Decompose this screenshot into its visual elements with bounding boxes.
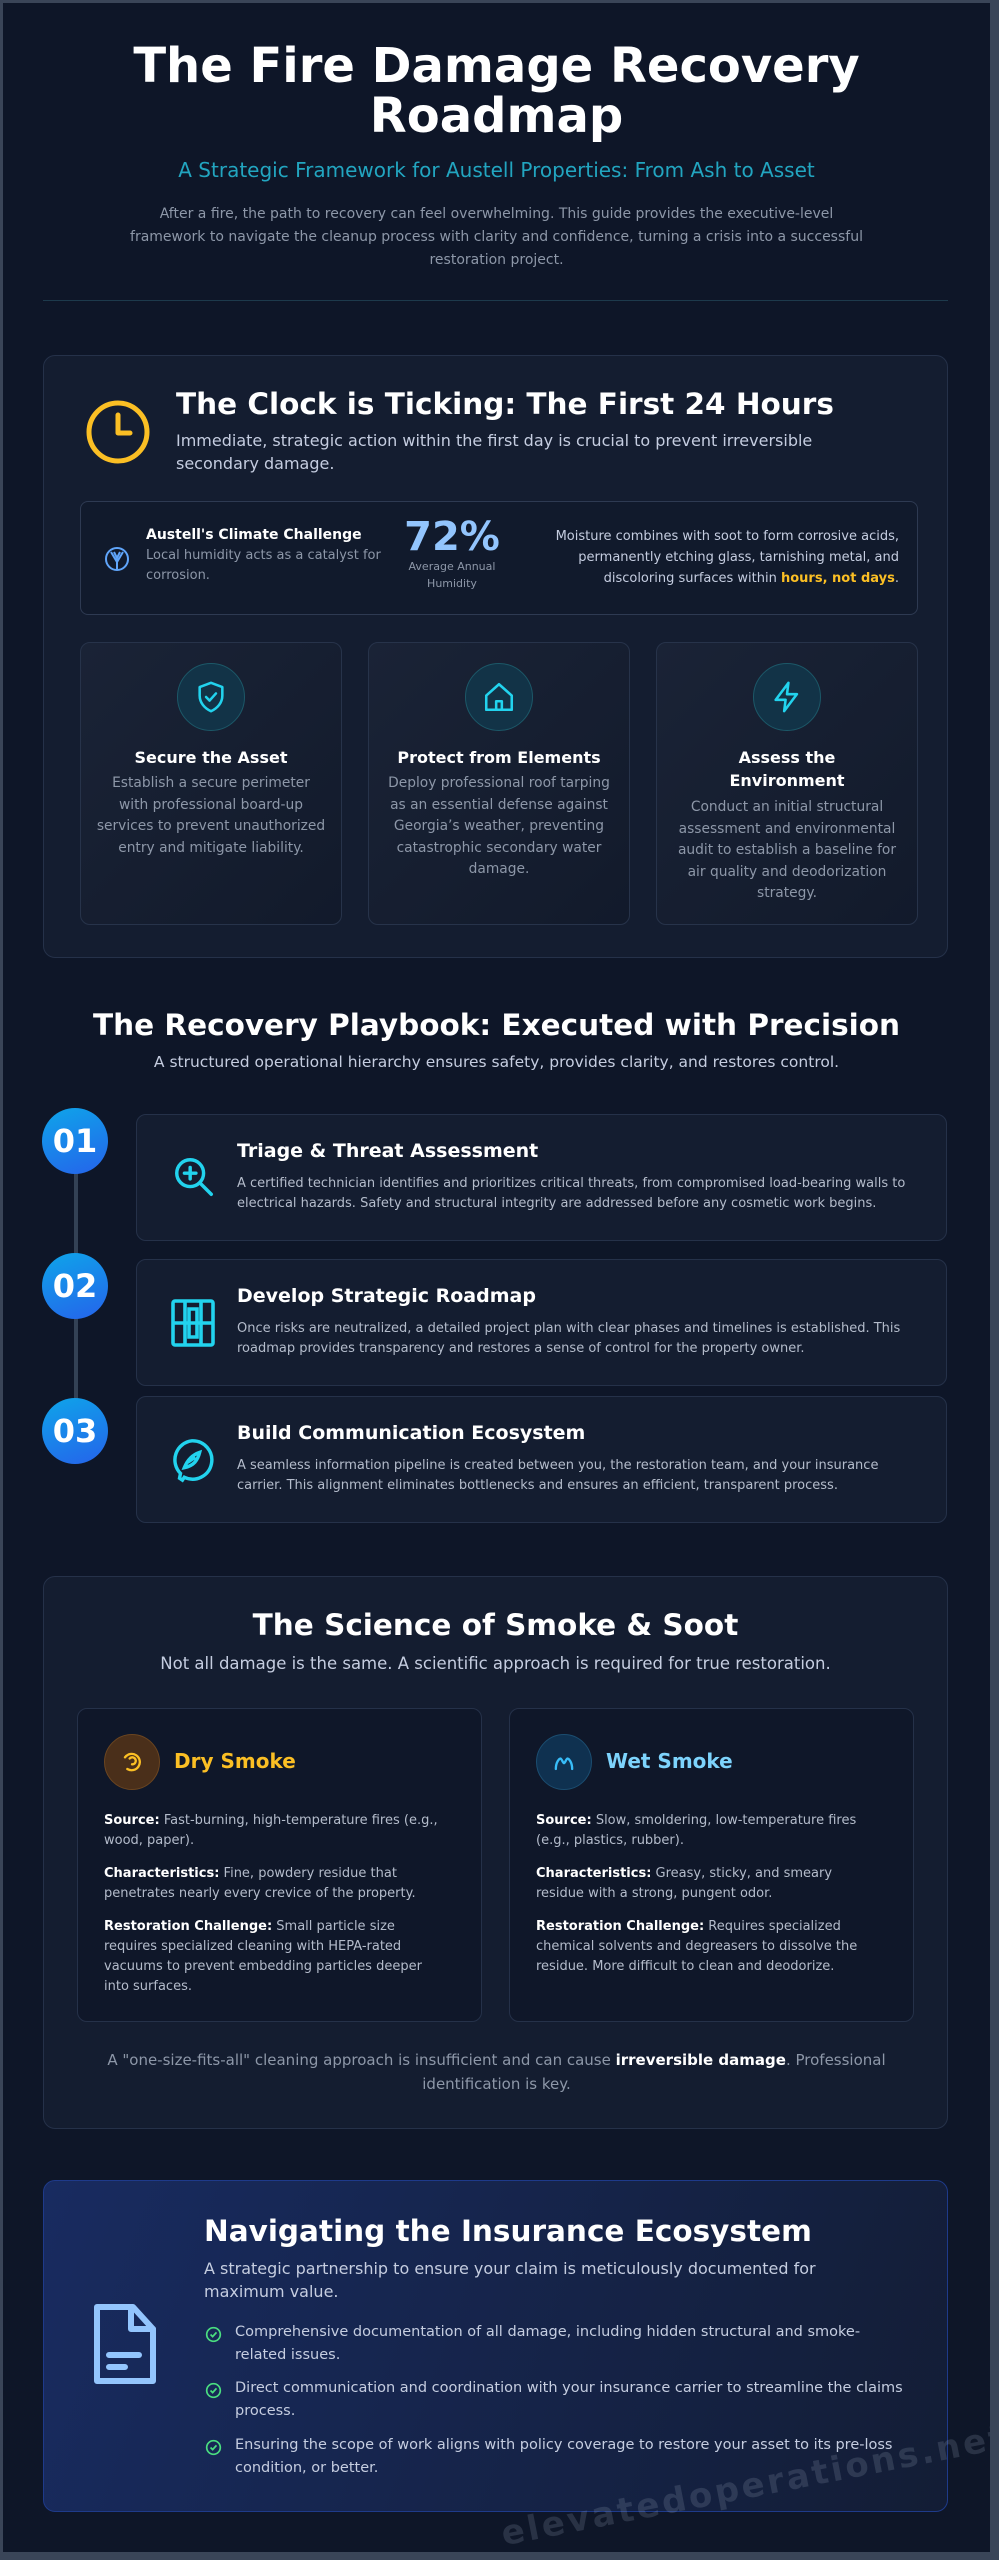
icon: document — [94, 2304, 156, 2384]
climate challenge text — [146, 527, 381, 583]
number 01 — [42, 1108, 108, 1174]
subheading: A strategic partnership to ensure your claim is meticulously documented for maximum value. — [204, 2259, 816, 2301]
subheading: Immediate, strategic action within the first day is crucial to prevent irreversible secondary damage. — [176, 431, 812, 473]
card: secure the asset: Secure the Asset — [135, 748, 287, 767]
icon: house — [465, 663, 533, 731]
climate box — [80, 501, 918, 615]
card: wet smoke: Characteristics: Greasy, sticky, and smeary residue with a strong, pungent odor. — [536, 1866, 832, 1901]
card: protect from elements — [368, 642, 630, 925]
card: protect from elements: Protect from Elements — [397, 748, 601, 767]
icon: shield — [177, 663, 245, 731]
heading: The Clock is Ticking: The First 24 Hours — [176, 387, 834, 421]
icon: dry smoke — [104, 1734, 160, 1790]
card: dry smoke: Characteristics: Fine, powdery residue that penetrates nearly every crevice of the property. — [104, 1866, 416, 1901]
subtitle: A Strategic Framework for Austell Properties: From Ash to Asset — [178, 158, 815, 182]
card: protect from elements: Deploy professional roof tarping as an essential defense against Georgia’s weather, preventing catastrophic secondary water damage. — [388, 775, 610, 877]
title: Roadmap — [370, 88, 623, 144]
heading: Navigating the Insurance Ecosystem — [204, 2214, 812, 2248]
stat: 72%: 72% — [404, 514, 500, 560]
heading: The Science of Smoke & Soot — [253, 1608, 738, 1642]
card: dry smoke: Restoration Challenge: Small particle size requires specialized cleaning with HEPA-rated vacuums to prevent embedding particles deeper into surfaces. — [104, 1919, 422, 1994]
title — [133, 38, 860, 144]
step 3 — [136, 1396, 947, 1523]
stat: 72%: Average Annual Humidity — [409, 560, 495, 590]
step 3: A seamless information pipeline is created between you, the restoration team, and your insurance carrier. This alignment eliminates bottlenecks and ensures an efficient, transparent process. — [237, 1458, 878, 1493]
card: secure the asset — [80, 642, 342, 925]
panel: smoke & soot — [43, 1576, 948, 2129]
card: secure the asset: services to prevent unauthorized — [97, 818, 325, 834]
panel: first 24 hours — [43, 355, 948, 958]
bullet 1: Comprehensive documentation of all damage, including hidden structural and smoke-related issues. — [235, 2324, 860, 2363]
number 02: 02 — [53, 1267, 97, 1305]
number 03 — [42, 1398, 108, 1464]
card: assess environment — [656, 642, 918, 925]
step 3: Build Communication Ecosystem — [237, 1422, 585, 1444]
panel: insurance — [43, 2180, 948, 2512]
card: wet smoke: Source: Slow, smoldering, low-temperature fires (e.g., plastics, rubber). — [536, 1813, 856, 1848]
moisture text: Moisture combines with soot to form corrosive acids, permanently etching glass, tarnishing metal, and discoloring surfaces within hours, not days. — [556, 529, 899, 586]
step 1 — [136, 1114, 947, 1241]
card: secure the asset: entry and mitigate liability. — [118, 840, 304, 856]
card: assess environment: Assess the — [739, 748, 835, 767]
card: assess environment: Conduct an initial structural assessment and environmental audit to establish a baseline for air quality and deodorization strategy. — [678, 799, 896, 901]
icon: magnifier — [175, 1158, 214, 1196]
icon: bolt — [753, 663, 821, 731]
stat: 72% — [404, 514, 500, 590]
title: Wet Smoke — [606, 1749, 733, 1773]
climate challenge text: Austell's Climate Challenge — [146, 527, 362, 543]
step 2 — [136, 1259, 947, 1386]
climate challenge text: Local humidity acts as a catalyst for corrosion. — [146, 548, 381, 583]
number 02 — [42, 1253, 108, 1319]
icon: humidity — [105, 547, 129, 571]
card: dry smoke — [77, 1708, 482, 2022]
card: secure the asset: Establish a secure perimeter — [112, 775, 310, 791]
step 2: Develop Strategic Roadmap — [237, 1285, 536, 1307]
icon: communication — [173, 1439, 214, 1482]
icon: clock — [86, 400, 150, 464]
subheading: Not all damage is the same. A scientific approach is required for true restoration. — [160, 1654, 831, 1673]
card: assess environment: Environment — [729, 771, 845, 790]
title: The Fire Damage Recovery — [133, 38, 860, 94]
icon: roadmap — [171, 1299, 215, 1347]
card: wet smoke: Restoration Challenge: Requires specialized chemical solvents and degreasers to dissolve the residue. More difficult to clean and deodorize. — [536, 1919, 857, 1974]
step 1: Triage & Threat Assessment — [237, 1140, 538, 1162]
card: wet smoke — [509, 1708, 914, 2022]
bullet 3: Ensuring the scope of work aligns with policy coverage to restore your asset to its pre-loss condition, or better. — [235, 2437, 892, 2476]
card: dry smoke: Source: Fast-burning, high-temperature fires (e.g., wood, paper). — [104, 1813, 438, 1848]
icon: wet smoke — [536, 1734, 592, 1790]
card: secure the asset: with professional board-up — [119, 796, 303, 812]
footer note: A "one-size-fits-all" cleaning approach is insufficient and can cause irreversible damage. Professional identification is key. — [107, 2051, 886, 2093]
number 03: 03 — [53, 1412, 97, 1450]
playbook subtitle: A structured operational hierarchy ensures safety, provides clarity, and restores control. — [154, 1053, 839, 1071]
number 01: 01 — [53, 1122, 97, 1160]
title: Dry Smoke — [174, 1749, 296, 1773]
step 2: Once risks are neutralized, a detailed project plan with clear phases and timelines is established. This roadmap provides transparency and restores a sense of control for the property owner. — [237, 1321, 900, 1356]
bullet 2: Direct communication and coordination with your insurance carrier to streamline the claims process. — [235, 2380, 903, 2419]
playbook heading: The Recovery Playbook: Executed with Precision — [93, 1008, 900, 1042]
step 1: A certified technician identifies and prioritizes critical threats, from compromised load-bearing walls to electrical hazards. Safety and structural integrity are addressed before any cosmetic work begins. — [237, 1176, 905, 1211]
intro text: After a fire, the path to recovery can feel overwhelming. This guide provides the executive-level framework to navigate the cleanup process with clarity and confidence, turning a crisis into a successful restoration project. — [130, 206, 863, 268]
